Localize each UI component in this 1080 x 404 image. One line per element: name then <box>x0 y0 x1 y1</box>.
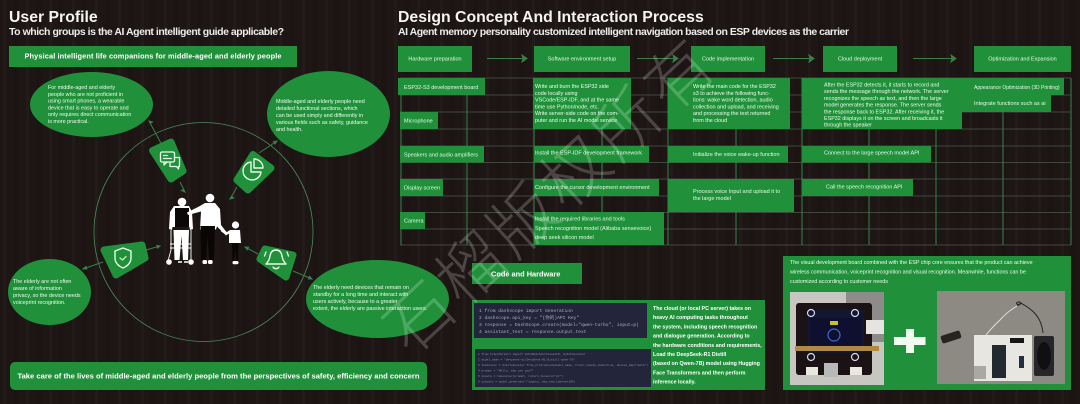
panel: user profile <box>8 9 449 390</box>
callout: functional sections: and health. <box>276 127 303 133</box>
cell: write and burn: Write server-side code on the com- <box>535 111 619 117</box>
arrow: software to code <box>637 55 678 62</box>
callout: functional sections: Middle-aged and elderly people need <box>276 99 365 105</box>
code block: model loading: 5 inputs = tokenizer(prompt, return_tensors="pt") <box>478 374 563 378</box>
step: hardware preparation: Hardware preparation <box>408 56 462 62</box>
arrow: code to cloud <box>773 55 814 62</box>
callout: standby devices: extent, the elderly are passive interaction users. <box>313 306 427 312</box>
callout: voiceprint privacy <box>8 259 91 325</box>
panel: hardware photos <box>783 256 1071 390</box>
icon: shield badge <box>104 245 145 275</box>
text block: cloud computing: and dialogue generation. According to <box>653 334 750 340</box>
callout: standby devices: standby for a long time and interact with <box>313 292 408 298</box>
heading: code and hardware <box>472 263 582 284</box>
text block: cloud computing: heavy AI computing tasks throughout <box>653 315 748 321</box>
code block: model loading <box>475 349 651 387</box>
text block: cloud computing: (based on Qwen-7B) model using Hugging <box>653 361 760 367</box>
cloud tasks <box>802 78 962 196</box>
cell: ESP32-S3 development board <box>398 78 485 95</box>
cell: install ESP-IDF <box>534 146 649 162</box>
cell: after detection: through the speaker <box>824 123 872 129</box>
callout: functional sections: can be used simply and differently in <box>276 113 363 119</box>
step: code implementation <box>691 46 765 72</box>
callout: smartphones: is more practical. <box>48 119 89 125</box>
callout: voiceprint privacy: aware of information <box>13 286 62 292</box>
icon: bell badge <box>260 249 293 277</box>
cell: after detection: After the ESP32 detects it, it starts to record and <box>824 82 939 88</box>
cell: write and burn: time use Python/node, etc. <box>535 104 599 110</box>
cell: speakers <box>400 146 484 162</box>
cell: write and burn: VSCode/ESP-IDF, and at the same <box>535 98 619 104</box>
cell: write main code: s3 to achieve the following func- <box>693 91 770 97</box>
heading: code and hardware: Code and Hardware <box>491 270 560 278</box>
cell: configure cursor <box>534 179 659 196</box>
code block: API call <box>474 303 647 338</box>
figure: child <box>221 221 241 264</box>
cell: write main code: Write the main code for the ESP32 <box>693 84 776 90</box>
cell: install ESP-IDF: Install the ESP-IDF development framework <box>535 150 642 156</box>
callout: functional sections: detailed functional sections, which <box>276 106 358 112</box>
arrow: hardware to software <box>487 55 527 62</box>
cell: install libraries: Speech recognition model (Alibaba sensevoice) <box>535 226 651 232</box>
cell: call speech API <box>802 179 913 196</box>
arrow: cloud to optimization <box>913 55 956 62</box>
cell: microphone: Microphone <box>404 118 433 124</box>
step: hardware preparation <box>398 46 472 72</box>
callout: functional sections: various fields such as safety, guidance <box>276 120 368 126</box>
cell: after detection <box>802 78 962 129</box>
cell: install libraries: deep seek silicon model <box>535 235 594 241</box>
cell: process voice: Process voice Input and upload it to <box>693 189 780 195</box>
step: cloud deployment <box>823 46 897 72</box>
callout: voiceprint privacy: The elderly are not often <box>13 279 71 285</box>
title: design concept: Design Concept And Interaction Process <box>398 9 704 26</box>
cell: write main code: collection and upload, and receiving <box>693 104 779 110</box>
callout: smartphones: only requires direct communication <box>48 112 131 118</box>
cell: integrate functions: Integrate functions such as ai <box>974 101 1046 107</box>
banner: life companions <box>9 46 297 67</box>
cell: install libraries: Install the required libraries and tools <box>535 216 625 222</box>
code block: model loading: 1 from transformers import AutoModelForCausalLM, AutoTokenizer <box>478 352 586 356</box>
icon: plus sign <box>894 329 926 353</box>
callout: standby devices <box>306 260 449 338</box>
cell: write and burn <box>533 78 631 129</box>
text block: cloud computing: the hardware conditions and requirements, <box>653 343 762 349</box>
cell: display screen: Display screen <box>404 186 440 192</box>
text block: cloud computing: the system, including speech recognition <box>653 324 757 330</box>
step: optimization and expansion: Optimization and Expansion <box>988 56 1057 62</box>
cell: write main code <box>668 78 790 129</box>
cell: after detection: recognizes the speech as text, and then the large <box>824 96 942 102</box>
arrows: bell badge <box>245 247 312 279</box>
callout: smartphones: people who are not proficient in <box>48 92 123 98</box>
banner: life companions: Physical intelligent life companions for middle-aged and elderly people <box>24 52 282 60</box>
cell: write main code: and processing the text returned <box>693 111 770 117</box>
callout: voiceprint privacy: voiceprint recognition. <box>13 300 65 306</box>
watermark: 石榴版权所有 <box>359 11 736 372</box>
optimization tasks <box>961 78 1064 112</box>
code block: model loading: 6 outputs = model.generate(**inputs, max_new_tokens=100) <box>478 380 575 384</box>
cell: after detection: ESP32 displays it on the screen and broadcasts it <box>824 116 943 122</box>
callout: standby devices: users actively, because to a greater <box>313 299 398 305</box>
text block: cloud computing: inference locally. <box>653 380 696 386</box>
step: code implementation: Code implementation <box>702 56 754 62</box>
cell: write and burn: puter and run the AI model service <box>535 118 617 124</box>
cell: connect speech model: Connect to the large speech model API <box>824 150 920 156</box>
code block: API call: 4 assistant_text = response.output.text <box>479 329 587 335</box>
icon: pie chart badge <box>237 154 271 190</box>
arrows: shield badge <box>83 245 160 269</box>
callout: smartphones: using smart phones, a wearable <box>48 99 124 105</box>
panel: design concept <box>398 9 1071 245</box>
code block: model loading: 2 model_name = "deepseek-ai/DeepSeek-R1-Distill-qwen-7b" <box>478 358 575 362</box>
cell: camera: Camera <box>404 218 425 224</box>
photo: breadboard and speaker <box>937 291 1065 384</box>
cell: write main code: from the cloud <box>693 118 727 124</box>
cell: install libraries <box>534 212 664 245</box>
subtitle: user groups: To which groups is the AI Agent intelligent guide applicable? <box>9 26 284 38</box>
cell: process voice: the large model <box>693 196 731 202</box>
cell: microphone <box>400 112 438 129</box>
central circle <box>94 122 313 342</box>
subtitle: navigation: AI Agent memory personality customized intelligent navigation based on ESP devices as the carrier <box>398 26 849 38</box>
step: software environment setup <box>534 46 630 72</box>
cell: speakers: Speakers and audio amplifiers <box>404 152 478 158</box>
panel: code and cloud <box>472 300 765 390</box>
code block: API call: 2 dashscope.api_key = "(你的)API Key" <box>479 314 579 321</box>
cell: display screen <box>400 179 443 196</box>
callout: smartphones: device that is easy to operate and <box>48 105 129 111</box>
cell: write main code: tions: wake word detection, audio <box>693 98 773 104</box>
illustration: family silhouette <box>166 194 241 265</box>
text block: cloud computing: Face Transformers and then perform <box>653 370 746 376</box>
cell: after detection: the response back to ESP32. After receiving it, the <box>824 109 944 115</box>
callout: smartphones <box>30 72 153 137</box>
text block: development board: wireless communication, voiceprint recognition and visual recognition. Meanwhile, functions can be <box>789 270 1026 276</box>
cell: camera <box>400 212 425 229</box>
text block: development board: customized according to customer needs <box>790 279 888 285</box>
figure: adult <box>187 194 228 264</box>
code block: model loading: 4 prompt = "Hello, who are you?" <box>478 368 534 372</box>
cell: connect speech model <box>802 146 931 162</box>
photo: development board <box>790 292 884 385</box>
code block: API call: 1 from dashscope import Generation <box>479 308 573 314</box>
arrows: chat badge <box>149 121 185 192</box>
cell: after detection: model generates the response. The server sends <box>824 103 942 109</box>
cell: appearance optimization: Appearance Optimization (3D Printing) <box>974 85 1060 91</box>
code tasks <box>668 78 794 212</box>
cell: configure cursor: Configure the cursor development environment <box>535 185 650 191</box>
step: cloud deployment: Cloud deployment <box>838 56 883 62</box>
text block: cloud computing: The cloud (or local PC server) takes on <box>653 306 751 312</box>
software tasks <box>533 78 664 245</box>
text block: cloud computing: Load the DeepSeek-R1 Distill <box>653 352 727 358</box>
text block: development board: The visual development board combined with the ESP chip core ensures that the product can achieve <box>790 260 1033 266</box>
cell: ESP32-S3 development board: ESP32-S3 development board <box>404 85 478 91</box>
hardware list <box>398 78 485 229</box>
callout: standby devices: The elderly need devices that remain on <box>313 285 409 291</box>
title: user profile: User Profile <box>9 9 98 26</box>
banner: care statement <box>10 362 427 390</box>
code block: model loading: 3 tokenizer = AutoTokenizer.from_pretrained(model_name, trust_remote_code=True, device_map="auto") <box>478 363 648 367</box>
cell: write and burn: code locally using <box>535 91 578 97</box>
callout: voiceprint privacy: privacy, so the device needs <box>13 293 81 299</box>
cell: voice wake-up: Initialize the voice wake-up function <box>693 152 780 158</box>
step: optimization and expansion <box>974 46 1071 72</box>
icon: chat badge <box>152 142 183 179</box>
code block: API call: 3 response = DashScope.create(model="qwen-turbo", input=p) <box>479 322 639 328</box>
cell: after detection: sends the message through the network. The server <box>824 89 949 95</box>
cell: write and burn: Write and burn the ESP32 side <box>535 84 609 90</box>
callout: functional sections <box>267 71 390 157</box>
callout: smartphones: For middle-aged and elderly <box>48 85 115 91</box>
cell: call speech API: Call the speech recognition API <box>826 184 903 190</box>
arrows: pie chart badge <box>230 141 277 199</box>
banner: care statement: Take care of the lives of middle-aged and elderly people from the perspectives of safety, efficiency and concern <box>18 372 420 380</box>
cell: process voice <box>668 179 794 212</box>
step: software environment setup: Software environment setup <box>548 56 616 62</box>
figure: elderly person with walker <box>166 198 194 265</box>
